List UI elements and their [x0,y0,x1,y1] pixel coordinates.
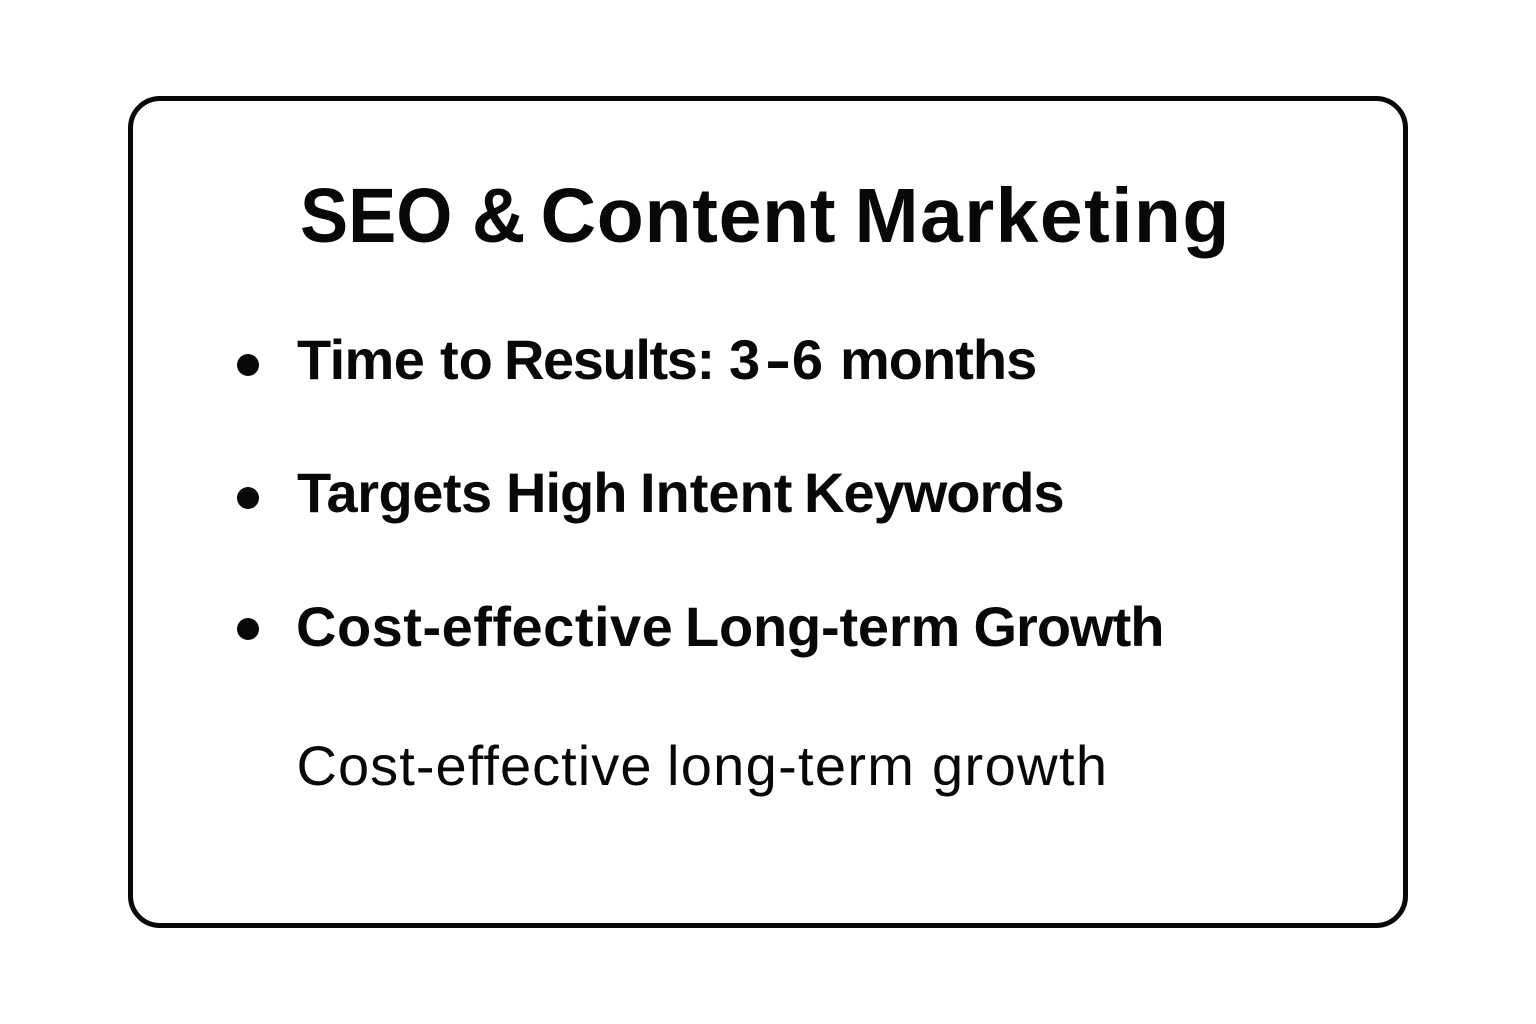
text: closing note: long-term [667,734,915,797]
bullet: time to results: - [765,328,791,391]
bullet: high intent keywords: Intent [640,461,792,524]
bullet: long-term growth [237,595,1163,658]
title: Content [540,173,836,259]
text: closing note: Cost-effective [296,734,653,797]
bullet: time to results: to [440,328,493,391]
bullet: long-term growth: Growth [974,595,1163,658]
bullet: high intent keywords: Targets [297,461,492,524]
bullet: high intent keywords [237,461,1064,524]
bullet: time to results: 3 6 [729,328,828,391]
panel: card [128,96,1408,928]
bullet: time to results: Results: [504,328,714,391]
title [300,173,1231,259]
bullet: long-term growth: Cost-effective [296,595,673,658]
bullet: long-term growth: Long-term [685,595,960,658]
bullet: high intent keywords: High [506,461,626,524]
title: & [472,173,525,259]
text: closing note [296,734,1108,797]
text: closing note: growth [932,734,1108,797]
title: SEO [300,173,452,259]
bullet: high intent keywords: Keywords [804,461,1064,524]
bullet: time to results: Time [297,328,424,391]
bullet: time to results [237,328,1036,391]
title: Marketing [854,173,1231,259]
bullet: time to results: months [840,328,1036,391]
